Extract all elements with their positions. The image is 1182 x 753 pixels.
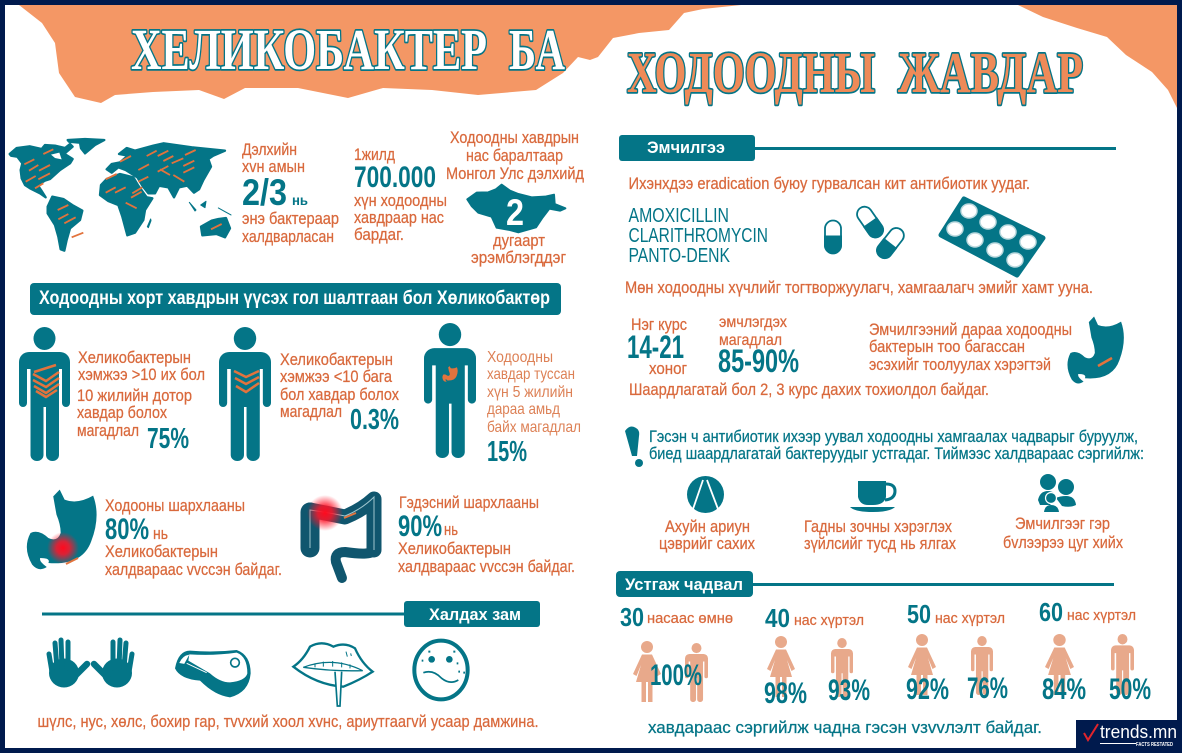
icon: person with high bacteria — [19, 327, 70, 461]
text: five year survival: дараа амьд — [487, 401, 561, 418]
stat: Mongolia ranks second: эрэмблэгддэг — [471, 248, 566, 267]
orange header band right — [1018, 5, 1177, 108]
group: up to 50: 92% — [906, 673, 949, 706]
title right: ХОДООДНЫ — [627, 40, 875, 105]
text: personal items: Гадны зочны хэрэглэх — [804, 517, 952, 536]
text: stomach ulcer 80%: 80% — [105, 513, 149, 546]
text: duodenal ulcer 90%: Гэдэсний шархлааны — [399, 493, 539, 512]
text: after treatment test — [869, 320, 1072, 374]
text: additional medicine: Мөн ходоодны хүчлийг тогтворжуулагч, хамгаалагч эмийг хамт ууна. — [625, 278, 1093, 297]
group: under 30: 30 — [620, 602, 644, 632]
text: stomach ulcer 80%: нь — [153, 524, 168, 543]
group: up to 40: 98% — [764, 677, 807, 710]
icon: person with low bacteria — [219, 327, 271, 461]
group: up to 40: 40 — [765, 603, 790, 633]
text: duodenal ulcer 90%: 90% — [398, 510, 442, 543]
heading bar: main cause: Ходоодны хорт хавдрын үүсэх гол шалтгаан бол Хөликобактөр — [39, 288, 550, 309]
text: personal items — [804, 517, 956, 553]
text: stomach ulcer 80%: халдвараас vvссэн байдаг. — [105, 560, 282, 579]
text: low bacteria risk: бол хавдар болох — [280, 385, 399, 404]
text: stomach ulcer 80%: Ходооны шархлааны — [105, 496, 245, 515]
text: hygiene: цэврийг сахих — [659, 534, 755, 553]
stat: two thirds of world population — [242, 140, 339, 246]
stat: Mongolia ranks second: Ходоодны хавдрын — [450, 128, 579, 147]
logo: trends.mn: FACTS RESTATED — [1136, 742, 1173, 748]
text: repeat courses: Шаардлагатай бол 2, 3 курс дахих тохиолдол байдаг. — [629, 380, 989, 399]
group: up to 50: 76% — [967, 672, 1008, 705]
text: stomach ulcer 80% — [105, 496, 282, 579]
orange header band left — [19, 5, 741, 103]
stat: 700000 deaths per year: бардаг. — [354, 225, 404, 244]
stat: 700000 deaths per year — [354, 145, 447, 244]
list: antibiotics: AMOXICILLIN — [628, 205, 729, 227]
text: high bacteria risk: Хеликобактерын — [78, 348, 191, 367]
heading bar: main cause — [30, 283, 561, 315]
text: five year survival: 15% — [487, 436, 527, 468]
icon: stomach — [1067, 317, 1124, 383]
group: up to 50 — [906, 599, 1008, 706]
group: up to 60: 84% — [1042, 673, 1086, 706]
logo: trends.mn — [1076, 720, 1182, 753]
heading: transmission routes: Халдах зам — [429, 605, 521, 624]
icon: exclamation mark — [625, 427, 643, 467]
text: five year survival: байх магадлал — [487, 419, 581, 436]
group: up to 50: нас хүртэл — [935, 610, 1005, 627]
text: stomach ulcer 80%: Хеликобактерын — [105, 542, 218, 561]
title left: ХЕЛИКОБАКТЕР — [131, 17, 487, 82]
heading: prevention capacity — [616, 571, 1114, 597]
text: family treatment: Эмчилгээг гэр — [1015, 514, 1110, 533]
text: high bacteria risk: хэмжээ >10 их бол — [78, 365, 205, 384]
stat: course length: 14-21 — [627, 329, 684, 365]
stat: course length: Нэг курс — [631, 315, 687, 334]
text: duodenal ulcer 90% — [398, 493, 575, 576]
text: transmission routes: шүлс, нус, хөлс, бохир гар, тvvхий хоол хvнс, ариутгаагvй усаар дамжина. — [38, 713, 538, 731]
text: after treatment test: эсэхийг тоолуулах хэрэгтэй — [869, 355, 1051, 374]
stat: cure probability: эмчлэгдэх — [719, 314, 787, 331]
title left: БА — [509, 17, 565, 82]
text: after treatment test: Эмчилгээний дараа ходоодны — [869, 320, 1072, 339]
text: low bacteria risk: Хеликобактерын — [280, 350, 393, 369]
icon: sick face — [414, 641, 468, 699]
stat: two thirds of world population: 2/3 — [242, 172, 287, 213]
stat: 700000 deaths per year: 700.000 — [354, 161, 436, 194]
icon: blister pack — [941, 199, 1043, 275]
group: under 30: насаас өмнө — [647, 610, 733, 627]
icon: cup — [850, 481, 895, 512]
icon: person with stomach cancer — [424, 323, 476, 458]
logo: trends.mn: trends.mn — [1100, 722, 1177, 742]
text: high bacteria risk: 10 жилийн дотор — [77, 386, 192, 405]
icon: fork and knife — [687, 476, 724, 513]
text: low bacteria risk: хэмжээ <10 бага — [280, 367, 392, 386]
list: antibiotics: PANTO-DENK — [628, 245, 731, 267]
stat: two thirds of world population: хvн амын — [242, 157, 305, 176]
title right: ЖАВДАР — [898, 40, 1083, 105]
text: family treatment: бvлээрээ цуг хийх — [1003, 533, 1123, 552]
stat: two thirds of world population: Дэлхийн — [242, 140, 297, 159]
text: high bacteria risk: 75% — [147, 423, 189, 455]
stat: two thirds of world population: нь — [292, 192, 308, 208]
world map — [10, 139, 231, 251]
text: five year survival — [487, 349, 581, 468]
text: antibiotic warning — [649, 427, 1144, 463]
heading: transmission routes — [42, 601, 540, 627]
text: family treatment — [1003, 514, 1123, 552]
text: prevention footer: хавдараас сэргийлж чадна гэсэн vзvvлэлт байдаг. — [648, 718, 1042, 737]
icon: hands — [49, 640, 132, 688]
text: hygiene — [659, 517, 755, 553]
group: up to 60: 60 — [1039, 597, 1063, 627]
text: duodenal ulcer 90%: халдвараас vvссэн байдаг. — [398, 557, 575, 576]
stat: cure probability — [718, 314, 799, 379]
text: five year survival: хавдар туссан — [487, 366, 575, 383]
text: high bacteria risk: хавдар болох — [77, 403, 167, 422]
heading: prevention capacity: Устгаж чадвал — [625, 575, 743, 594]
stat: course length — [627, 315, 687, 378]
icon: capsules — [824, 203, 908, 262]
text: hygiene: Ахуйн ариун — [665, 517, 750, 536]
group: up to 40: нас хүртэл — [794, 612, 864, 629]
stat: 700000 deaths per year: хавдраар нас — [354, 208, 444, 227]
icon: family — [1038, 474, 1076, 512]
text: low bacteria risk — [280, 350, 399, 436]
group: up to 60 — [1039, 597, 1151, 706]
stat: two thirds of world population: халдварласан — [242, 227, 334, 246]
group: up to 60: 50% — [1109, 673, 1151, 706]
text: duodenal ulcer 90%: нь — [444, 520, 458, 539]
group: under 30: 100% — [650, 659, 702, 692]
list: antibiotics: CLARITHROMYCIN — [628, 225, 768, 247]
text: after treatment test: бактерын тоо багассан — [869, 337, 1025, 356]
stat: course length: хоног — [649, 359, 687, 378]
stat: Mongolia ranks second: дугаарт — [493, 231, 545, 250]
stat: 700000 deaths per year: хүн ходоодны — [354, 191, 447, 210]
icon: mouth with saliva — [293, 643, 373, 706]
text: personal items: зүйлсийг тусд нь ялгах — [804, 534, 956, 553]
stat: Mongolia ranks second: 2 — [506, 192, 524, 233]
group: up to 50: 50 — [907, 599, 931, 629]
text: high bacteria risk: магадлал — [77, 421, 139, 440]
list: antibiotics — [628, 205, 768, 267]
stat: cure probability: 85-90% — [718, 343, 799, 379]
group: under 30 — [620, 602, 733, 702]
stat: Mongolia ranks second: нас баралтаар — [466, 146, 563, 165]
group: up to 60: нас хүртэл — [1067, 607, 1136, 624]
stat: Mongolia ranks second: Монгол Улс дэлхийд — [446, 164, 584, 183]
heading: treatment — [619, 135, 1116, 161]
stat: Mongolia ranks second — [446, 128, 584, 267]
icon: raw meat — [175, 650, 251, 697]
icon: intestine with ulcer — [307, 495, 374, 578]
text: five year survival: Ходоодны — [487, 349, 553, 366]
stat: cure probability: магадлал — [719, 332, 782, 349]
text: low bacteria risk: 0.3% — [350, 404, 399, 436]
icon: stomach ulcer — [27, 490, 97, 569]
stat: two thirds of world population: энэ бактераар — [242, 209, 339, 228]
heading: treatment: Эмчилгээ — [647, 138, 725, 157]
group: up to 40 — [764, 603, 870, 710]
text: five year survival: хүн 5 жилийн — [487, 384, 573, 401]
text: low bacteria risk: магадлал — [280, 402, 342, 421]
text: triple therapy: Ихэнхдээ eradication буюу гурвалсан кит антибиотик уудаг. — [628, 174, 1030, 193]
group: up to 40: 93% — [828, 674, 870, 707]
stat: 700000 deaths per year: 1жилд — [354, 145, 395, 164]
icon: Mongolia map — [467, 185, 565, 232]
text: duodenal ulcer 90%: Хеликобактерын — [398, 539, 511, 558]
text: high bacteria risk — [77, 348, 205, 455]
